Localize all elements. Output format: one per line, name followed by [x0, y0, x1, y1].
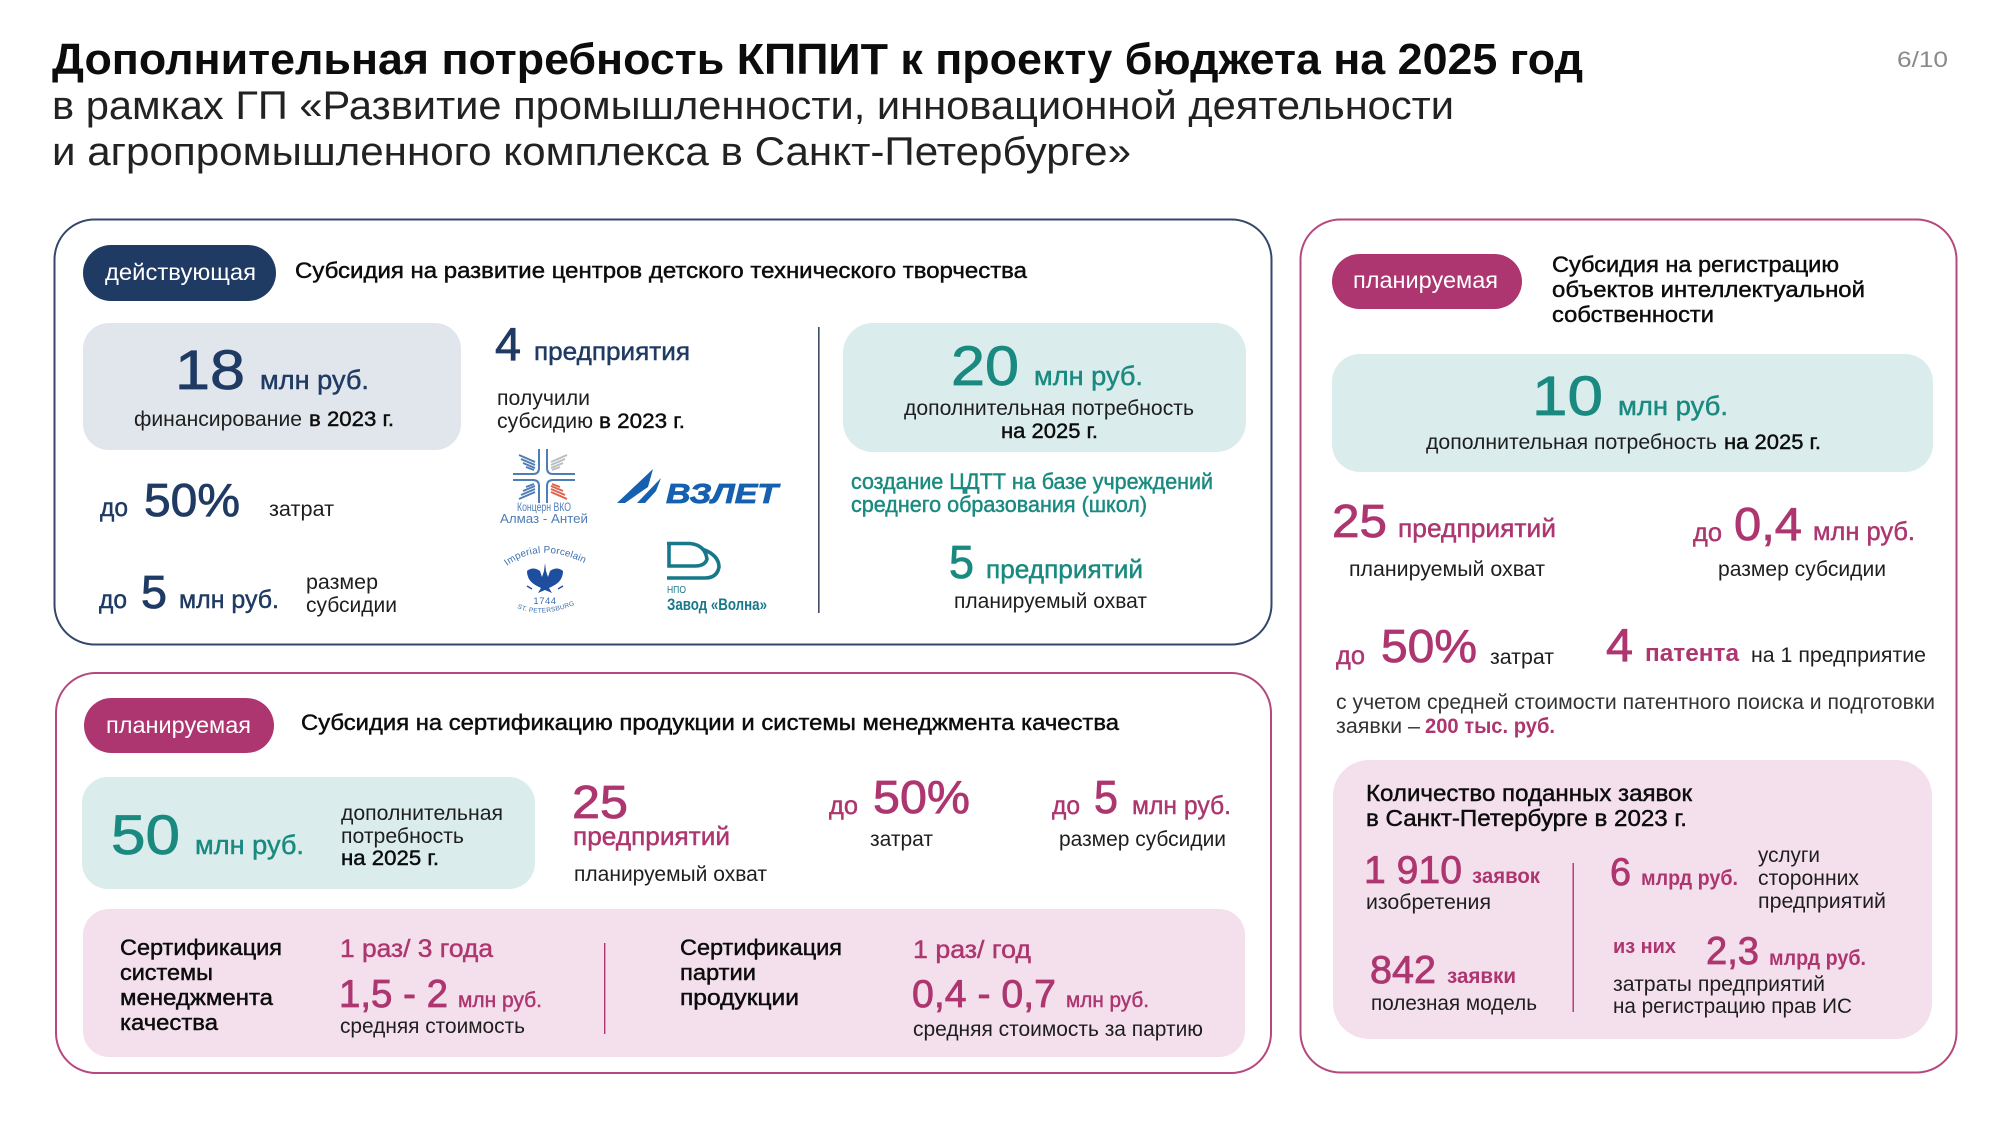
batch certification: млн руб. — [1066, 989, 1149, 1012]
stat: registration costs — [1613, 930, 1866, 1018]
status pill: current: действующая — [105, 259, 256, 285]
subtitle — [52, 84, 1454, 174]
stat: registration costs: 2,3 — [1706, 930, 1759, 973]
stat: inventions: заявок — [1472, 865, 1540, 888]
panel heading: Субсидия на развитие центров детского технического творчества — [295, 258, 1028, 283]
management system certification: качества — [120, 1010, 219, 1035]
logo: Vzlet — [617, 469, 782, 509]
subtitle: и агропромышленного комплекса в Санкт-Петербурге» — [52, 130, 1131, 174]
logo: Volna plant — [667, 544, 767, 614]
stat: patents — [1606, 619, 1926, 671]
stat: enterprises funded — [495, 318, 690, 433]
stat: enterprises funded: субсидию — [497, 410, 593, 433]
stat: patents: на 1 предприятие — [1751, 644, 1926, 667]
additional need box: млн руб. — [195, 830, 304, 860]
applications box — [1333, 760, 1932, 1039]
stat: registration costs: затраты предприятий — [1613, 973, 1825, 996]
stat: third-party services: предприятий — [1758, 890, 1886, 913]
stat: planned coverage: 25 — [572, 776, 628, 828]
stat: third-party services: 6 — [1610, 851, 1631, 894]
batch certification: средняя стоимость за партию — [913, 1018, 1203, 1041]
logo: Almaz-Antey: Алмаз - Антей — [500, 511, 588, 526]
stat: patents: патента — [1645, 640, 1740, 667]
stat: subsidy size — [1693, 498, 1915, 581]
cost note: заявки – — [1336, 715, 1420, 738]
panel heading: собственности — [1552, 302, 1714, 327]
stat: subsidy size: до — [1052, 790, 1080, 820]
stat: planned coverage — [572, 776, 767, 886]
stat: share of costs: затрат — [870, 828, 933, 851]
status pill: planned: планируемая — [106, 712, 251, 738]
additional need box: 10 — [1532, 364, 1603, 427]
cost note — [1336, 691, 1935, 738]
stat: subsidy size — [99, 566, 397, 618]
batch certification: Сертификация — [680, 935, 842, 960]
logo: Vzlet: ВЗЛЕТ — [666, 478, 782, 509]
status pill: planned — [1332, 254, 1522, 309]
stat: share of costs: затрат — [1490, 646, 1554, 669]
additional need box: на 2025 г. — [341, 847, 439, 870]
stat: share of costs: затрат — [269, 498, 334, 521]
batch certification: партии — [680, 960, 756, 985]
stat: share of costs: 50% — [144, 474, 240, 526]
logo: Imperial Porcelain: ST. PETERSBURG — [518, 601, 574, 613]
stat: subsidy size: млн руб. — [1813, 516, 1915, 546]
additional need box: 20 — [951, 334, 1019, 397]
additional need box — [82, 777, 535, 889]
stat: planned coverage: предприятий — [573, 821, 730, 851]
funding box: млн руб. — [260, 365, 369, 395]
status pill: planned: планируемая — [1353, 267, 1498, 293]
stat: subsidy size: до — [1693, 517, 1722, 547]
logo: Almaz-Antey — [500, 449, 588, 526]
stat: planned coverage: предприятий — [1398, 513, 1556, 543]
stat: inventions: 1 910 — [1364, 849, 1462, 892]
stat: planned coverage: планируемый охват — [574, 863, 767, 886]
stat: patents: 4 — [1606, 619, 1633, 671]
additional need box: на 2025 г. — [1724, 431, 1821, 454]
cost note: 200 тыс. руб. — [1425, 715, 1555, 738]
additional need box: млн руб. — [1034, 361, 1143, 391]
stat: subsidy size: млн руб. — [179, 586, 279, 614]
additional need box: дополнительная потребность — [1426, 431, 1717, 454]
stat: enterprises funded: в 2023 г. — [599, 410, 685, 433]
stat: subsidy size: субсидии — [306, 594, 397, 617]
management system certification: менеджмента — [120, 985, 274, 1010]
funding box: финансирование — [134, 408, 302, 431]
stat: registration costs: млрд руб. — [1769, 947, 1866, 970]
stat: planned coverage: предприятий — [986, 554, 1143, 584]
additional need box — [1332, 354, 1933, 472]
stat: enterprises funded: предприятия — [534, 338, 690, 366]
stat: registration costs: из них — [1613, 936, 1676, 958]
stat: share of costs: 50% — [873, 771, 970, 823]
stat: third-party services — [1610, 844, 1886, 913]
stat: subsidy size: 0,4 — [1734, 498, 1802, 550]
stat: share of costs — [1336, 620, 1554, 672]
eagle emblem — [527, 563, 563, 593]
panel: certification subsidy — [56, 673, 1271, 1073]
logo: Imperial Porcelain — [504, 546, 586, 613]
applications heading: в Санкт-Петербурге в 2023 г. — [1366, 805, 1687, 831]
stat: registration costs: на регистрацию прав ИС — [1613, 995, 1852, 1018]
additional need box: потребность — [341, 825, 464, 848]
batch certification — [680, 935, 1203, 1041]
panel heading — [1552, 252, 1865, 327]
stat: planned coverage — [1332, 495, 1556, 581]
panel heading: объектов интеллектуальной — [1552, 277, 1865, 302]
logo: Volna plant: НПО — [667, 584, 686, 596]
additional need box — [843, 323, 1246, 452]
management system certification: 1,5 - 2 — [339, 973, 448, 1016]
logo: Volna plant: Завод «Волна» — [667, 595, 767, 614]
stat: subsidy size: размер субсидии — [1718, 558, 1886, 581]
stat: subsidy size: до — [99, 584, 127, 614]
management system certification — [120, 935, 542, 1038]
certification costs box — [83, 909, 1245, 1057]
management system certification: 1 раз/ 3 года — [340, 935, 493, 963]
stat: enterprises funded: 4 — [495, 318, 521, 370]
page number: 6/10 — [1897, 47, 1948, 72]
management system certification: средняя стоимость — [340, 1015, 525, 1038]
purpose note: создание ЦДТТ на базе учреждений — [851, 469, 1213, 494]
purpose note — [851, 469, 1213, 517]
stat: inventions: изобретения — [1366, 891, 1491, 914]
additional need box: 50 — [111, 803, 180, 866]
panel heading: Субсидия на сертификацию продукции и системы менеджмента качества — [301, 710, 1120, 735]
stat: subsidy size: 5 — [141, 566, 167, 618]
stat: share of costs: до — [100, 492, 128, 522]
subtitle: в рамках ГП «Развитие промышленности, инновационной деятельности — [52, 84, 1454, 128]
stat: third-party services: сторонних — [1758, 867, 1859, 890]
funding box: в 2023 г. — [309, 408, 394, 431]
stat: third-party services: млрд руб. — [1641, 867, 1738, 890]
stat: subsidy size: 5 — [1094, 771, 1118, 823]
funding box — [83, 323, 461, 450]
management system certification: Сертификация — [120, 935, 282, 960]
stat: subsidy size: размер субсидии — [1059, 828, 1226, 851]
additional need box: на 2025 г. — [1001, 420, 1098, 443]
stat: subsidy size: размер — [306, 571, 378, 594]
stat: planned coverage: планируемый охват — [1349, 558, 1545, 581]
management system certification: системы — [120, 960, 213, 985]
stat: utility models — [1370, 949, 1537, 1015]
status pill: planned — [84, 698, 274, 753]
stat: share of costs: 50% — [1381, 620, 1477, 672]
additional need box: дополнительная потребность — [904, 397, 1194, 420]
stat: planned coverage: планируемый охват — [954, 590, 1147, 613]
batch certification: продукции — [680, 985, 799, 1010]
stat: share of costs: до — [829, 790, 858, 820]
stat: third-party services: услуги — [1758, 844, 1820, 867]
management system certification: млн руб. — [458, 989, 542, 1012]
stat: subsidy size: млн руб. — [1132, 790, 1231, 820]
batch certification: 1 раз/ год — [913, 936, 1031, 964]
applications heading: Количество поданных заявок — [1366, 780, 1693, 806]
panel heading: Субсидия на регистрацию — [1552, 252, 1839, 277]
cost note: с учетом средней стоимости патентного поиска и подготовки — [1336, 691, 1935, 714]
stat: planned coverage — [949, 536, 1147, 613]
logo: Almaz-Antey: Концерн ВКО — [517, 502, 571, 514]
stat: utility models: заявки — [1447, 965, 1516, 988]
stat: planned coverage: 25 — [1332, 495, 1387, 547]
batch certification: 0,4 - 0,7 — [912, 973, 1056, 1016]
panel: IP registration subsidy — [1300, 220, 1956, 1072]
additional need box: дополнительная — [341, 802, 503, 825]
stat: inventions — [1364, 849, 1540, 914]
funding box: 18 — [175, 338, 245, 401]
stat: share of costs — [829, 771, 970, 851]
stat: subsidy size — [1052, 771, 1231, 851]
purpose note: среднего образования (школ) — [851, 492, 1147, 517]
additional need box: млн руб. — [1618, 391, 1728, 421]
stat: enterprises funded: получили — [497, 387, 590, 410]
stat: share of costs — [100, 474, 334, 526]
applications heading — [1366, 780, 1693, 831]
logo: Imperial Porcelain: 1744 — [533, 596, 557, 607]
status pill: current — [83, 245, 276, 301]
stat: utility models: полезная модель — [1371, 992, 1537, 1015]
stat: utility models: 842 — [1370, 949, 1436, 992]
logo: Imperial Porcelain: Imperial Porcelain — [504, 546, 586, 566]
title: Дополнительная потребность КППИТ к проекту бюджета на 2025 год — [52, 35, 1583, 84]
stat: share of costs: до — [1336, 640, 1365, 670]
panel: current subsidy — [54, 218, 1272, 646]
stat: planned coverage: 5 — [949, 536, 974, 588]
